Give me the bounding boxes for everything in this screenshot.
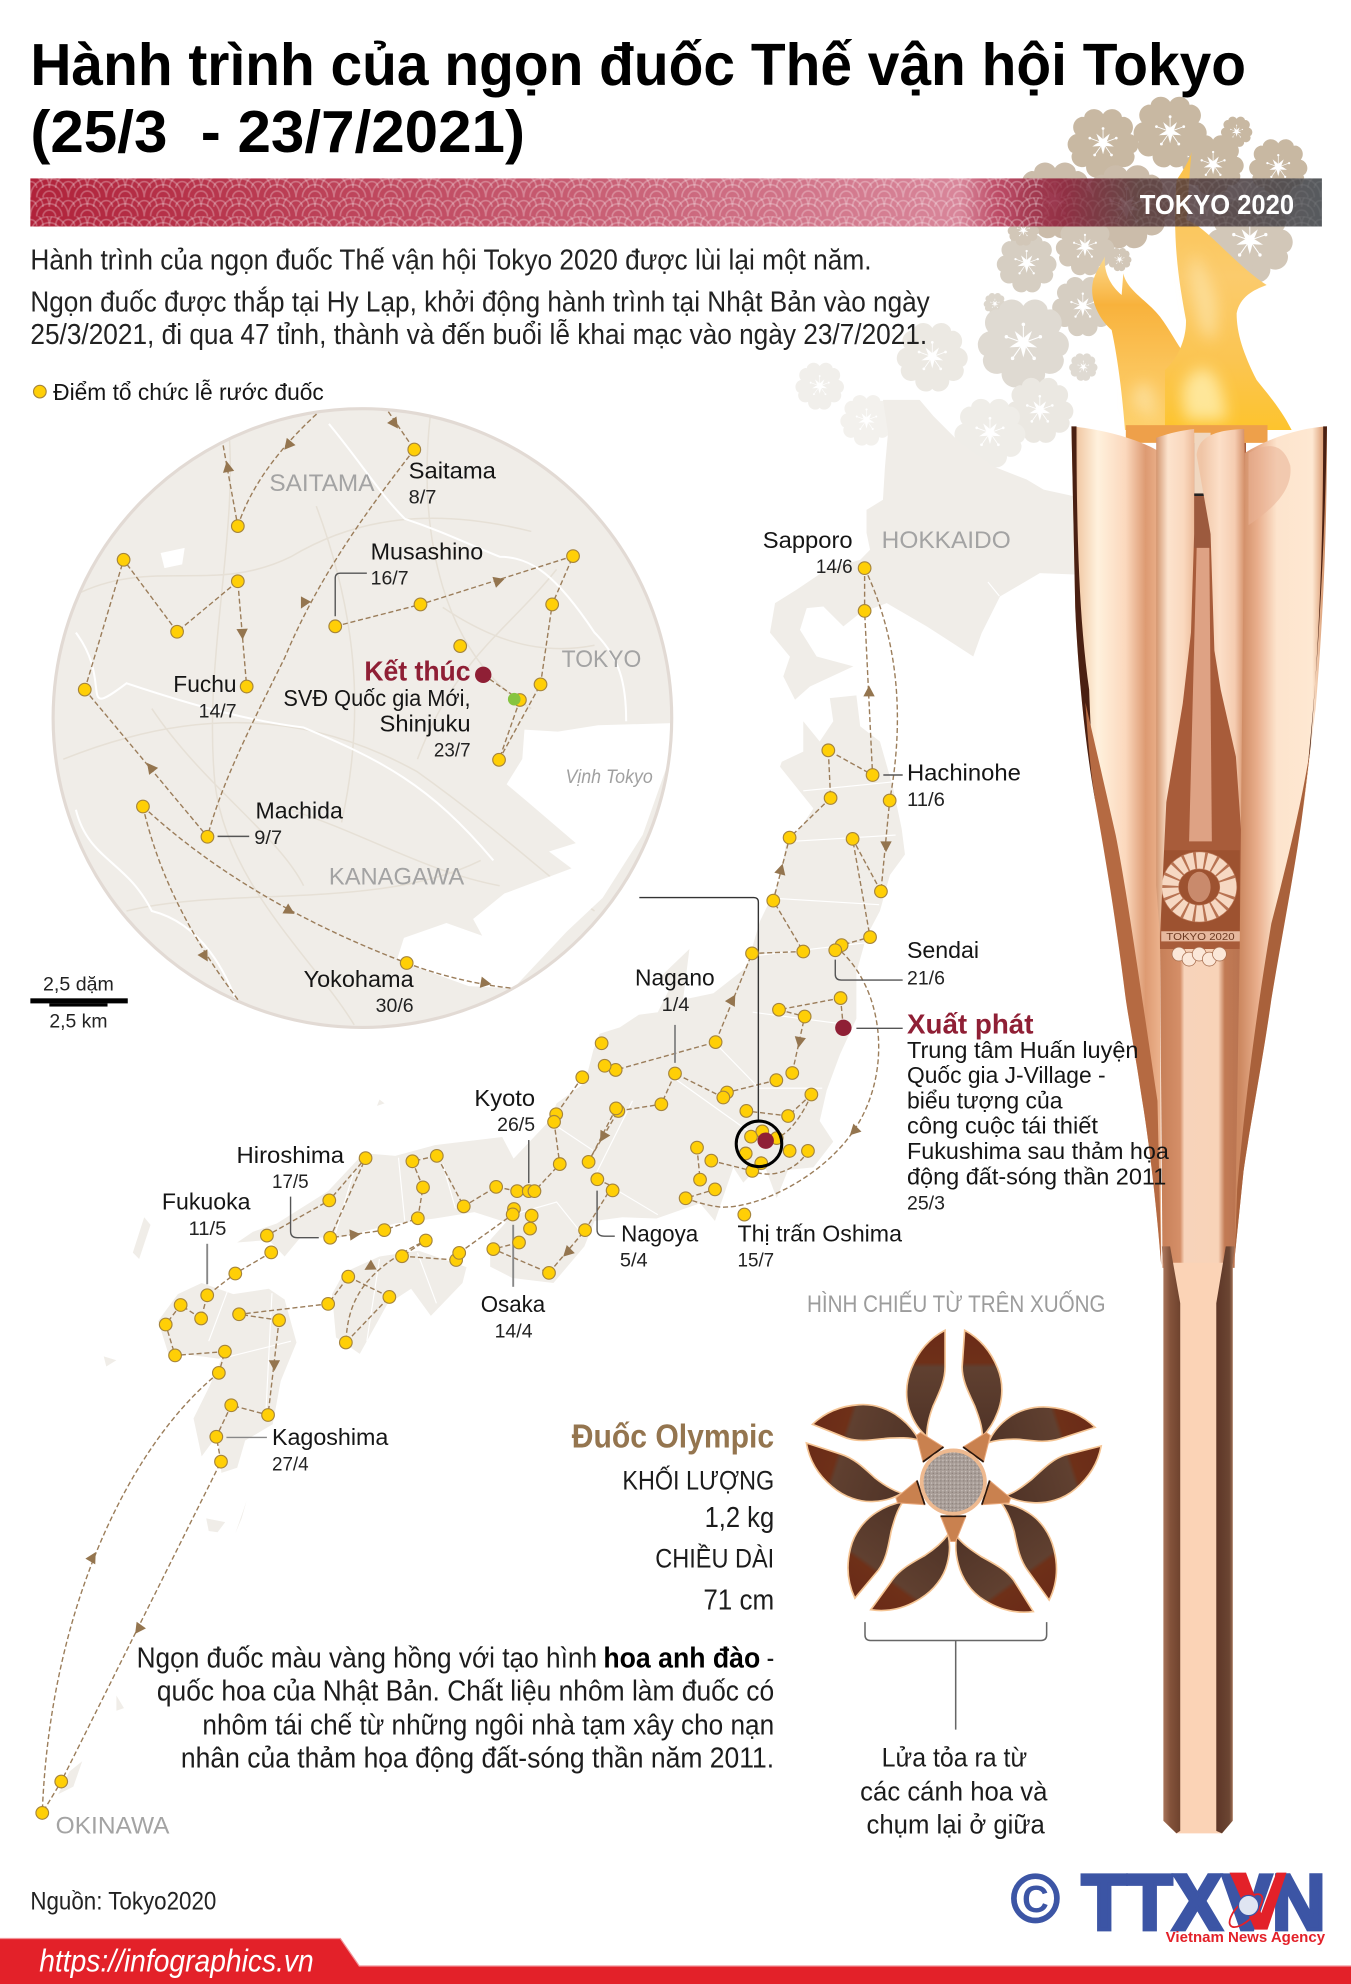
torch Olympic rings (1172, 947, 1226, 966)
start point callout: Trung tâm Huấn luyện (907, 1037, 1138, 1063)
main map city labels: Kyoto (474, 1085, 535, 1111)
main map city labels: Thị trấn Oshima (737, 1220, 903, 1246)
main map city labels: 5/4 (620, 1251, 648, 1272)
connector line from inset to Tokyo (639, 898, 758, 1121)
torch stem lower (1163, 1263, 1233, 1833)
inset region labels: Vịnh Tokyo (565, 766, 653, 788)
main map city labels: Osaka (481, 1291, 546, 1317)
torch wreath emblem (1161, 850, 1240, 931)
torch right petal shadow (1235, 747, 1311, 1258)
inset city labels: Shinjuku (379, 710, 471, 736)
copyright logo (1014, 1876, 1057, 1921)
inset region labels: KANAGAWA (329, 863, 464, 890)
main map city labels: Hachinohe (907, 760, 1021, 786)
TTXVN logo: TTXVN (1082, 1859, 1326, 1947)
footer bar: https://infographics.vn (39, 1942, 314, 1978)
title: (25/3 - 23/7/2021) (30, 98, 525, 165)
inset city labels: 8/7 (409, 488, 436, 509)
start point callout: Fukushima sau thảm họa (907, 1138, 1170, 1164)
torch inner cavity (1157, 443, 1246, 949)
title: Hành trình của ngọn đuốc Thế vận hội Tokyo (30, 31, 1246, 98)
copyright logo: C (1022, 1879, 1049, 1921)
torch stem right shadow stripe (1216, 1246, 1235, 1833)
inset region labels: TOKYO (562, 646, 641, 673)
main map region labels (56, 527, 1011, 1839)
torch burner and centre column (1189, 433, 1212, 841)
main map city labels: Sapporo (763, 527, 853, 553)
marker: Tokyo green stop (508, 693, 521, 706)
torch name band: TOKYO 2020 (1166, 932, 1235, 943)
torch description: - (767, 1643, 774, 1675)
torch specs: KHỐI LƯỢNG (622, 1465, 774, 1495)
main map city labels: 15/7 (737, 1251, 774, 1272)
scale bar: 2,5 dặm (43, 975, 114, 996)
main map city labels: Nagoya (621, 1220, 699, 1246)
main map city labels: 11/6 (907, 790, 945, 811)
inset city labels: Yokohama (304, 966, 415, 992)
main map region labels: OKINAWA (56, 1812, 170, 1839)
top-down torch flower (795, 1330, 1113, 1633)
main map city labels: 11/5 (188, 1219, 226, 1240)
start point callout: Quốc gia J-Village - (907, 1062, 1106, 1088)
torch right petal edge (1303, 426, 1327, 810)
flower petals (795, 1330, 1113, 1633)
sakura flower background (794, 97, 1309, 471)
footer bar (0, 1938, 1351, 1984)
torch specs: 71 cm (703, 1584, 774, 1616)
title (30, 31, 1246, 165)
marker: start point (835, 1020, 852, 1036)
intro text: Hành trình của ngọn đuốc Thế vận hội Tokyo 2020 được lùi lại một năm. (30, 245, 872, 277)
main map city labels: Nagano (635, 965, 715, 991)
torch description: nhôm tái chế từ những ngôi nhà tạm xây cho nạn (202, 1710, 774, 1742)
inset road and river texture (63, 418, 672, 1025)
marker: finish point (475, 667, 491, 683)
main map city labels: 26/5 (497, 1115, 535, 1136)
torch centre-left petal (1156, 429, 1194, 936)
inset city labels: 30/6 (376, 996, 414, 1017)
flame left tongue (1092, 257, 1193, 430)
legend: Điểm tổ chức lễ rước đuốc (53, 379, 324, 405)
main map city labels: 17/5 (272, 1172, 309, 1193)
torch specs: Đuốc Olympic (572, 1418, 774, 1455)
map of Japan land masses (58, 400, 1075, 1794)
main map city labels: 21/6 (907, 968, 945, 989)
torch centre-right petal (1197, 429, 1245, 943)
torch description: quốc hoa của Nhật Bản. Chất liệu nhôm làm đuốc có (157, 1676, 774, 1708)
torch stem left shadow stripe (1162, 1246, 1180, 1833)
inset city labels: Machida (256, 798, 344, 824)
main map city labels (162, 527, 1021, 1475)
start point callout: Xuất phát (907, 1009, 1033, 1040)
main map city labels: Fukuoka (162, 1189, 251, 1215)
caption: flame note (860, 1742, 1048, 1839)
main map city labels: Sendai (907, 937, 979, 963)
TTXVN logo: Vietnam News Agency (1166, 1929, 1326, 1946)
main map city labels: 1/4 (662, 995, 689, 1016)
Tokyo location ring (736, 1121, 782, 1167)
main map routes (42, 568, 897, 1813)
scale bar (30, 975, 128, 1032)
start point callout: động đất-sóng thần 2011 (907, 1163, 1166, 1189)
main map city labels: Hiroshima (237, 1142, 345, 1168)
start point callout (907, 1009, 1170, 1215)
torch description: hoa anh đào (603, 1643, 760, 1675)
scale bar: 2,5 km (49, 1011, 108, 1032)
inset map arrows (143, 416, 506, 990)
source: Nguồn: Tokyo2020 (30, 1887, 216, 1915)
Olympic torch (1071, 425, 1327, 1833)
main map city labels: 27/4 (272, 1454, 309, 1475)
flower burner disc (920, 1449, 987, 1516)
inset city labels (173, 457, 497, 1017)
torch description (137, 1643, 774, 1775)
flame core highlights (1133, 253, 1227, 420)
intro text: Ngọn đuốc được thắp tại Hy Lạp, khởi động hành trình tại Nhật Bản vào ngày (30, 286, 930, 318)
torch description: nhân của thảm họa động đất-sóng thần năm 2011. (181, 1743, 774, 1775)
Tokyo bay water (397, 723, 672, 988)
flower connectors (893, 1427, 1014, 1542)
heading: top-down view: HÌNH CHIẾU TỪ TRÊN XUỐNG (807, 1290, 1106, 1318)
inset city labels: 23/7 (434, 741, 471, 762)
torch flame (1092, 152, 1292, 430)
flame centre and right tongue (1165, 152, 1292, 430)
inset city labels: Saitama (409, 457, 497, 483)
panel: Tokyo inset map (53, 409, 672, 1027)
inset region labels (269, 470, 653, 890)
banner (30, 178, 1322, 226)
caption: flame note: các cánh hoa và (860, 1777, 1048, 1807)
intro text (30, 245, 930, 351)
inset region labels: SAITAMA (269, 470, 374, 497)
torch specs (572, 1418, 774, 1616)
torch specs: CHIỀU DÀI (655, 1544, 774, 1574)
prefecture boundaries (209, 582, 999, 1417)
start point callout: biểu tượng của (907, 1087, 1064, 1113)
inset map routes (85, 412, 573, 1001)
inset city labels: 16/7 (371, 569, 409, 590)
inset city labels: 9/7 (254, 828, 282, 849)
torch right petal (1235, 426, 1327, 1258)
main map city labels: Kagoshima (272, 1424, 389, 1450)
inset city labels: Musashino (371, 538, 483, 564)
bracket pointer (865, 1622, 1047, 1730)
torch description: Ngọn đuốc màu vàng hồng với tạo hình (137, 1643, 597, 1675)
start point callout: 25/3 (907, 1194, 945, 1215)
inset map stops (78, 443, 579, 969)
torch stem upper (1160, 941, 1241, 1268)
torch left petal edge (1071, 426, 1095, 802)
intro text: 25/3/2021, đi qua 47 tỉnh, thành và đến buổi lễ khai mạc vào ngày 23/7/2021. (30, 319, 927, 351)
banner: TOKYO 2020 (1140, 189, 1294, 220)
main map stops (36, 562, 896, 1819)
caption: flame note: chụm lại ở giữa (867, 1809, 1045, 1839)
main map city labels: 14/6 (816, 557, 853, 578)
inset city labels: 14/7 (199, 701, 237, 722)
main map leader lines (207, 775, 903, 1437)
inset city labels: Fuchu (173, 671, 237, 697)
inset city labels: Kết thúc (364, 656, 471, 687)
caption: flame note: Lửa tỏa ra từ (882, 1742, 1027, 1772)
torch left petal shadow (1085, 702, 1161, 1265)
start point callout: công cuộc tái thiết (907, 1113, 1099, 1139)
main map region labels: HOKKAIDO (882, 527, 1011, 554)
main map city labels: 14/4 (495, 1321, 533, 1342)
torch specs: 1,2 kg (705, 1502, 774, 1534)
inset city labels: SVĐ Quốc gia Mới, (283, 685, 471, 711)
torch back rim (1126, 425, 1268, 443)
torch left petal (1071, 426, 1161, 1265)
main map arrows (85, 686, 892, 1637)
